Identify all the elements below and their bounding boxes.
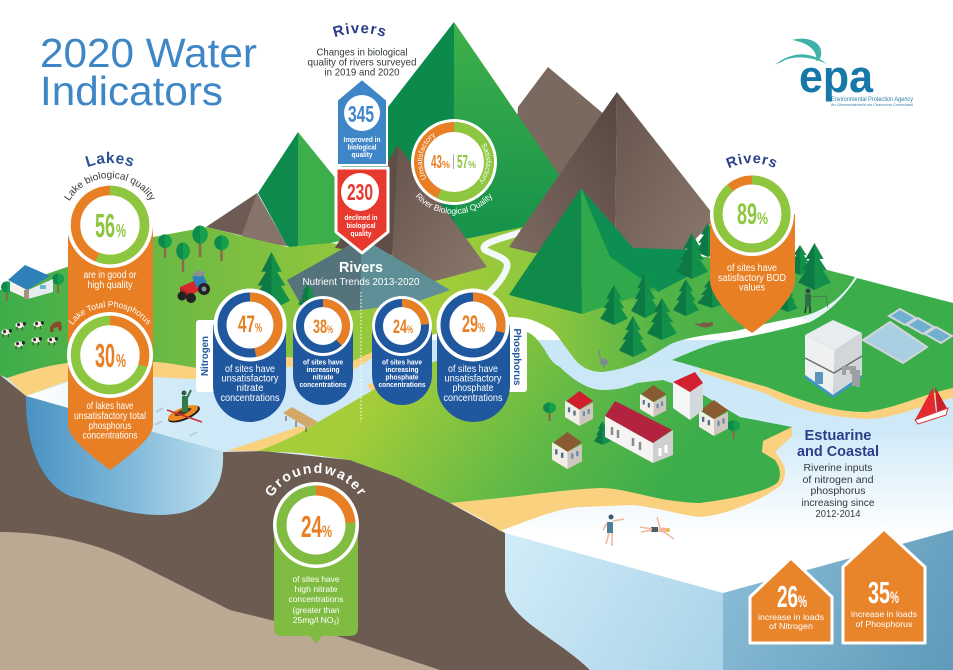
EPA logo: Environmental Protection Agency <box>831 96 914 103</box>
panel: rivers nutrient trends <box>196 259 527 422</box>
lake total phosphorus label: Lake Total Phosphorus <box>68 301 150 325</box>
groundwater caption: (greater than <box>292 605 340 615</box>
gauge: phosphate 29 percent: % <box>478 320 485 335</box>
callout: phosphorus 35 percent <box>843 529 925 643</box>
panel: estuarine and coastal <box>750 428 925 643</box>
red tag: declined <box>336 168 388 253</box>
donut: river biological quality: % <box>442 160 450 171</box>
gauge: nitrate 47 percent: % <box>255 320 262 335</box>
callout: phosphorus 35 percent: 35 <box>868 575 890 610</box>
icon: treatment tanks <box>863 309 952 363</box>
donut: 24 percent: 24 <box>301 509 322 544</box>
rivers description: Changes in biological <box>316 46 408 58</box>
callout: phosphorus 35 percent: increase in loads <box>851 609 917 619</box>
groundwater caption: 3 <box>333 620 336 626</box>
gauge: phosphate 24 percent: % <box>407 324 413 336</box>
EPA logo: epa <box>799 51 874 102</box>
gauge: phosphate 24 percent: concentrations <box>378 380 426 389</box>
icon: heron <box>599 350 608 368</box>
lakes heading: Lakes <box>85 152 134 167</box>
divider <box>360 292 362 422</box>
callout: phosphorus 35 percent: of Phosphorus <box>856 619 912 629</box>
EPA logo: An Ghníomhaireacht um Chaomhnú Comhshaoil <box>830 102 913 107</box>
lake phosphorus caption: concentrations <box>82 430 138 442</box>
red tag: declined: declined in <box>344 215 378 222</box>
gauge: nitrate 47 percent: nitrate <box>236 383 264 394</box>
gauge: nitrate 47 percent: of sites have <box>225 364 275 375</box>
estuarine description: Riverine inputs <box>804 462 872 474</box>
donut: 56 percent <box>67 182 153 268</box>
gauge: nitrate 38 percent: of sites have <box>303 358 343 366</box>
nitrogen label: Nitrogen <box>199 336 211 376</box>
icon: fox <box>694 322 713 328</box>
round trees <box>1 226 740 439</box>
icon: angler <box>805 288 828 313</box>
gauge: phosphate 29 percent: of sites have <box>448 364 498 375</box>
title <box>40 30 257 114</box>
gauge: nitrate 47 percent <box>213 288 286 422</box>
donut: 30 percent <box>67 312 153 398</box>
winding stream <box>484 232 521 294</box>
gauge: nitrate 38 percent: % <box>327 324 333 336</box>
gauge: phosphate 29 percent <box>436 288 510 422</box>
rivers heading: Rivers <box>332 23 386 37</box>
gauge: nitrate 38 percent: increasing <box>306 365 340 374</box>
lake phosphorus caption: phosphorus <box>88 421 132 432</box>
forest pines <box>253 233 831 445</box>
estuarine description: phosphorus <box>810 485 866 497</box>
groundwater tag body <box>274 525 358 644</box>
donut: 30 percent: 30 <box>95 337 115 374</box>
gauge: nitrate 38 percent: concentrations <box>300 380 346 389</box>
panel: lakes <box>64 152 155 470</box>
gauge: phosphate 29 percent: concentrations <box>444 393 502 404</box>
icon: swimmers <box>603 514 674 546</box>
icon: kayaker <box>155 390 202 436</box>
lakes tag body <box>68 225 153 470</box>
upper river highlight <box>800 277 857 322</box>
donut: river biological quality: River Biological Quality <box>416 193 492 216</box>
BOD caption: satisfactory BOD <box>718 273 786 284</box>
title: Indicators <box>40 68 223 114</box>
icon: village houses <box>552 372 728 469</box>
lake phosphorus caption: unsatisfactory total <box>74 411 146 422</box>
callout: nitrogen 26 percent: % <box>798 592 807 611</box>
gauge: nitrate 47 percent: unsatisfactory <box>222 374 278 384</box>
red tag: declined: 230 <box>347 179 373 205</box>
donut: river biological quality: % <box>468 160 476 171</box>
icon: farmhouse <box>8 265 53 299</box>
lake quality caption <box>84 270 137 291</box>
gauge: phosphate 24 percent <box>372 296 432 405</box>
estuarine heading: and Coastal <box>797 444 879 460</box>
donut: river biological quality: 57 <box>457 152 468 172</box>
lake biological quality label: Lake biological quality <box>64 170 155 201</box>
blue tag: improved: Improved in <box>344 137 380 144</box>
callout: phosphorus 35 percent: % <box>890 588 899 607</box>
icon: wooden jetty <box>283 407 318 432</box>
callout: nitrogen 26 percent: 26 <box>777 579 798 614</box>
estuarine heading <box>797 428 879 460</box>
panel: groundwater <box>266 462 366 644</box>
gauge: phosphate 24 percent: 24 <box>393 317 407 338</box>
back pines <box>695 223 812 312</box>
donut: 24 percent <box>273 482 359 568</box>
BOD tag body <box>710 214 795 333</box>
gauge: nitrate 38 percent: 38 <box>313 317 327 338</box>
gauge: phosphate 24 percent: phosphate <box>386 372 418 382</box>
red tag: declined: biological <box>346 223 376 230</box>
gauge: nitrate 38 percent: nitrate <box>312 372 334 382</box>
icon: sailboat <box>915 387 948 424</box>
blue tag: improved: biological <box>348 144 377 152</box>
sea surface and lake water <box>0 340 953 593</box>
icon: treatment building <box>805 320 862 398</box>
callout: nitrogen 26 percent: increase in loads <box>758 612 824 622</box>
gauge: nitrate 47 percent: concentrations <box>220 393 280 404</box>
callout: nitrogen 26 percent <box>750 558 832 643</box>
donut: 56 percent: % <box>116 221 126 241</box>
central brown mountain <box>335 145 487 285</box>
lake phosphorus caption <box>74 401 146 442</box>
nutrient heading: Nutrient Trends 2013-2020 <box>302 276 420 288</box>
donut: river biological quality <box>411 119 497 216</box>
lake surface and cross-section <box>26 350 420 515</box>
donut: 89 percent: 89 <box>737 198 757 231</box>
gauge: nitrate 38 percent <box>293 296 353 405</box>
landscape: green land <box>0 227 953 503</box>
gauge: phosphate 24 percent: of sites have <box>382 358 422 366</box>
BOD heading: Rivers <box>726 154 776 168</box>
lake quality caption: high quality <box>88 280 132 291</box>
landscape: far mountains <box>206 22 605 262</box>
gauge: nitrate 47 percent: 47 <box>238 311 255 338</box>
estuarine heading: Estuarine <box>804 428 872 444</box>
estuarine description <box>802 462 875 520</box>
groundwater caption: concentrations <box>288 594 344 604</box>
groundwater caption: 25mg/l NO <box>293 615 333 625</box>
groundwater caption: ) <box>336 615 339 625</box>
gauge: phosphate 29 percent: unsatisfactory <box>444 374 502 384</box>
icon: cows <box>1 321 62 349</box>
BOD caption: values <box>739 282 765 294</box>
callout: nitrogen 26 percent: of Nitrogen <box>769 621 813 631</box>
blue tag: improved: 345 <box>348 101 374 127</box>
phosphorus label: Phosphorus <box>511 328 523 386</box>
donut: 56 percent: 56 <box>95 207 115 244</box>
gauge: phosphate 29 percent: phosphate <box>452 383 494 394</box>
right brown mountain <box>509 92 716 253</box>
nutrient heading: Rivers <box>339 259 383 276</box>
icon: tractor <box>178 270 210 303</box>
red tag: declined: quality <box>350 231 372 238</box>
ground layers <box>0 375 590 670</box>
estuarine description: 2012-2014 <box>816 508 861 520</box>
sand shorelines <box>7 345 953 531</box>
estuarine description: of nitrogen and <box>802 474 874 486</box>
rivers description: in 2019 and 2020 <box>324 66 400 78</box>
panel: rivers biological change <box>308 23 417 254</box>
title: 2020 Water <box>40 30 257 76</box>
panel: rivers BOD <box>710 154 795 333</box>
donut: 24 percent: % <box>322 522 332 541</box>
groundwater caption: high nitrate <box>294 584 338 594</box>
rivers description <box>308 46 417 78</box>
front green mountain <box>509 188 700 314</box>
nutrient heading <box>302 259 420 288</box>
donut: 30 percent: % <box>116 351 126 371</box>
phosphorus label <box>503 320 527 392</box>
groundwater heading: Groundwater <box>266 462 366 496</box>
EPA logo <box>775 39 914 107</box>
rivers description: quality of rivers surveyed <box>308 56 417 68</box>
donut: 89 percent <box>710 172 794 256</box>
BOD caption: of sites have <box>727 263 777 274</box>
groundwater caption <box>288 574 344 626</box>
donut: river biological quality: Satisfactory <box>480 143 492 184</box>
sea cross-section <box>505 530 953 670</box>
gauge: phosphate 29 percent: 29 <box>462 311 478 338</box>
lake phosphorus caption: of lakes have <box>86 401 134 412</box>
lake quality caption: are in good or <box>84 270 137 281</box>
blue tag: improved: quality <box>352 152 373 159</box>
donut: river biological quality: 43 <box>431 152 442 172</box>
gauge: phosphate 24 percent: increasing <box>386 365 419 374</box>
groundwater caption: of sites have <box>292 574 340 584</box>
estuarine description: increasing since <box>802 497 875 509</box>
donut: 89 percent: % <box>757 209 768 228</box>
BOD caption <box>718 263 786 294</box>
blue tag: improved <box>337 79 387 165</box>
nitrogen label <box>196 320 220 392</box>
donut: river biological quality: Unsatisfactory <box>416 132 435 180</box>
teal pyramid behind nutrient heading <box>287 238 450 312</box>
